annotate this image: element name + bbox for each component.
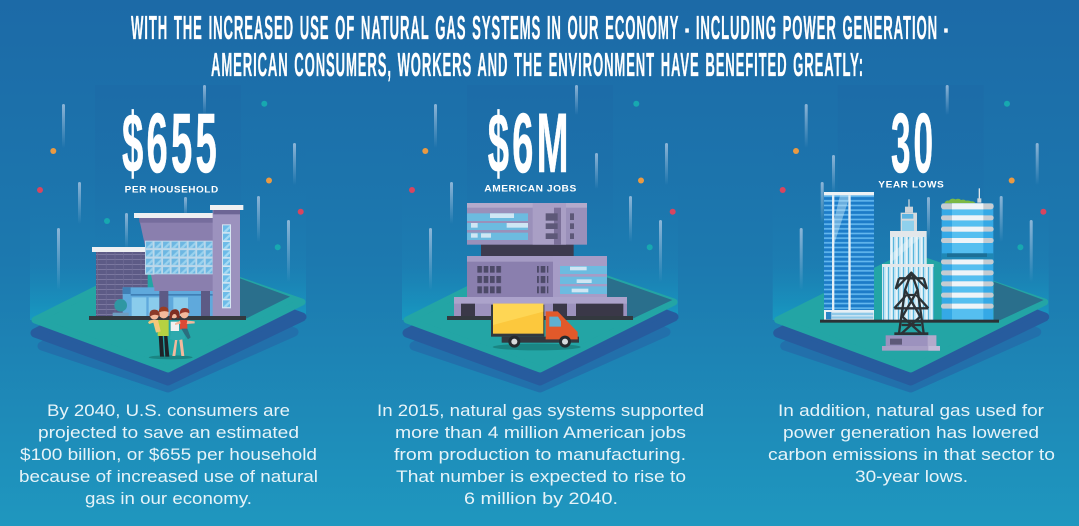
platform and backdrop [30, 85, 306, 388]
label: year lows: YEAR LOWS [878, 180, 944, 191]
panel: year lows: 30 [891, 96, 936, 190]
streaks [832, 155, 930, 241]
illustration: transmission tower [882, 273, 940, 351]
text block: household savings: By 2040, U.S. consumers are [47, 401, 290, 420]
text block: carbon emissions: power generation has lowered [783, 423, 1039, 442]
platform and backdrop [402, 85, 678, 388]
text block: jobs: more than 4 million American jobs [395, 423, 686, 442]
text block: carbon emissions: In addition, natural gas used for [778, 401, 1044, 420]
panel: per household: $655 [122, 96, 220, 190]
label: american jobs: AMERICAN JOBS [484, 184, 577, 195]
text block: household savings: because of increased use of natural [19, 467, 318, 486]
text block: carbon emissions [768, 401, 1055, 486]
illustration: family [148, 307, 195, 359]
text block: jobs: In 2015, natural gas systems supported [377, 401, 704, 420]
streaks behind building [125, 197, 187, 249]
panel: american jobs: $6M [488, 96, 572, 190]
label: per household: PER HOUSEHOLD [125, 185, 219, 196]
text block: household savings: $100 billion, or $655 per household [20, 445, 317, 464]
illustration: delivery truck [491, 304, 581, 350]
illustration: office building [89, 205, 290, 320]
text block: carbon emissions: carbon emissions in that sector to [768, 445, 1055, 464]
streak behind building [595, 153, 598, 189]
illustration: skyscrapers [820, 188, 1044, 323]
panel: per household [30, 85, 306, 388]
text block: household savings: gas in our economy. [85, 489, 252, 508]
text block: household savings [19, 401, 318, 508]
text block: jobs: 6 million by 2040. [464, 489, 618, 508]
illustration: factory building [447, 203, 672, 320]
platform and backdrop [773, 85, 1049, 388]
panel: year lows [773, 85, 1049, 388]
text block: household savings: projected to save an estimated [38, 423, 299, 442]
text block: jobs: That number is expected to rise to [396, 467, 686, 486]
title [131, 9, 949, 83]
text block: carbon emissions: 30-year lows. [855, 467, 968, 486]
text block: jobs: from production to manufacturing. [394, 445, 686, 464]
panel: american jobs [402, 85, 678, 388]
text block: jobs [377, 401, 704, 508]
